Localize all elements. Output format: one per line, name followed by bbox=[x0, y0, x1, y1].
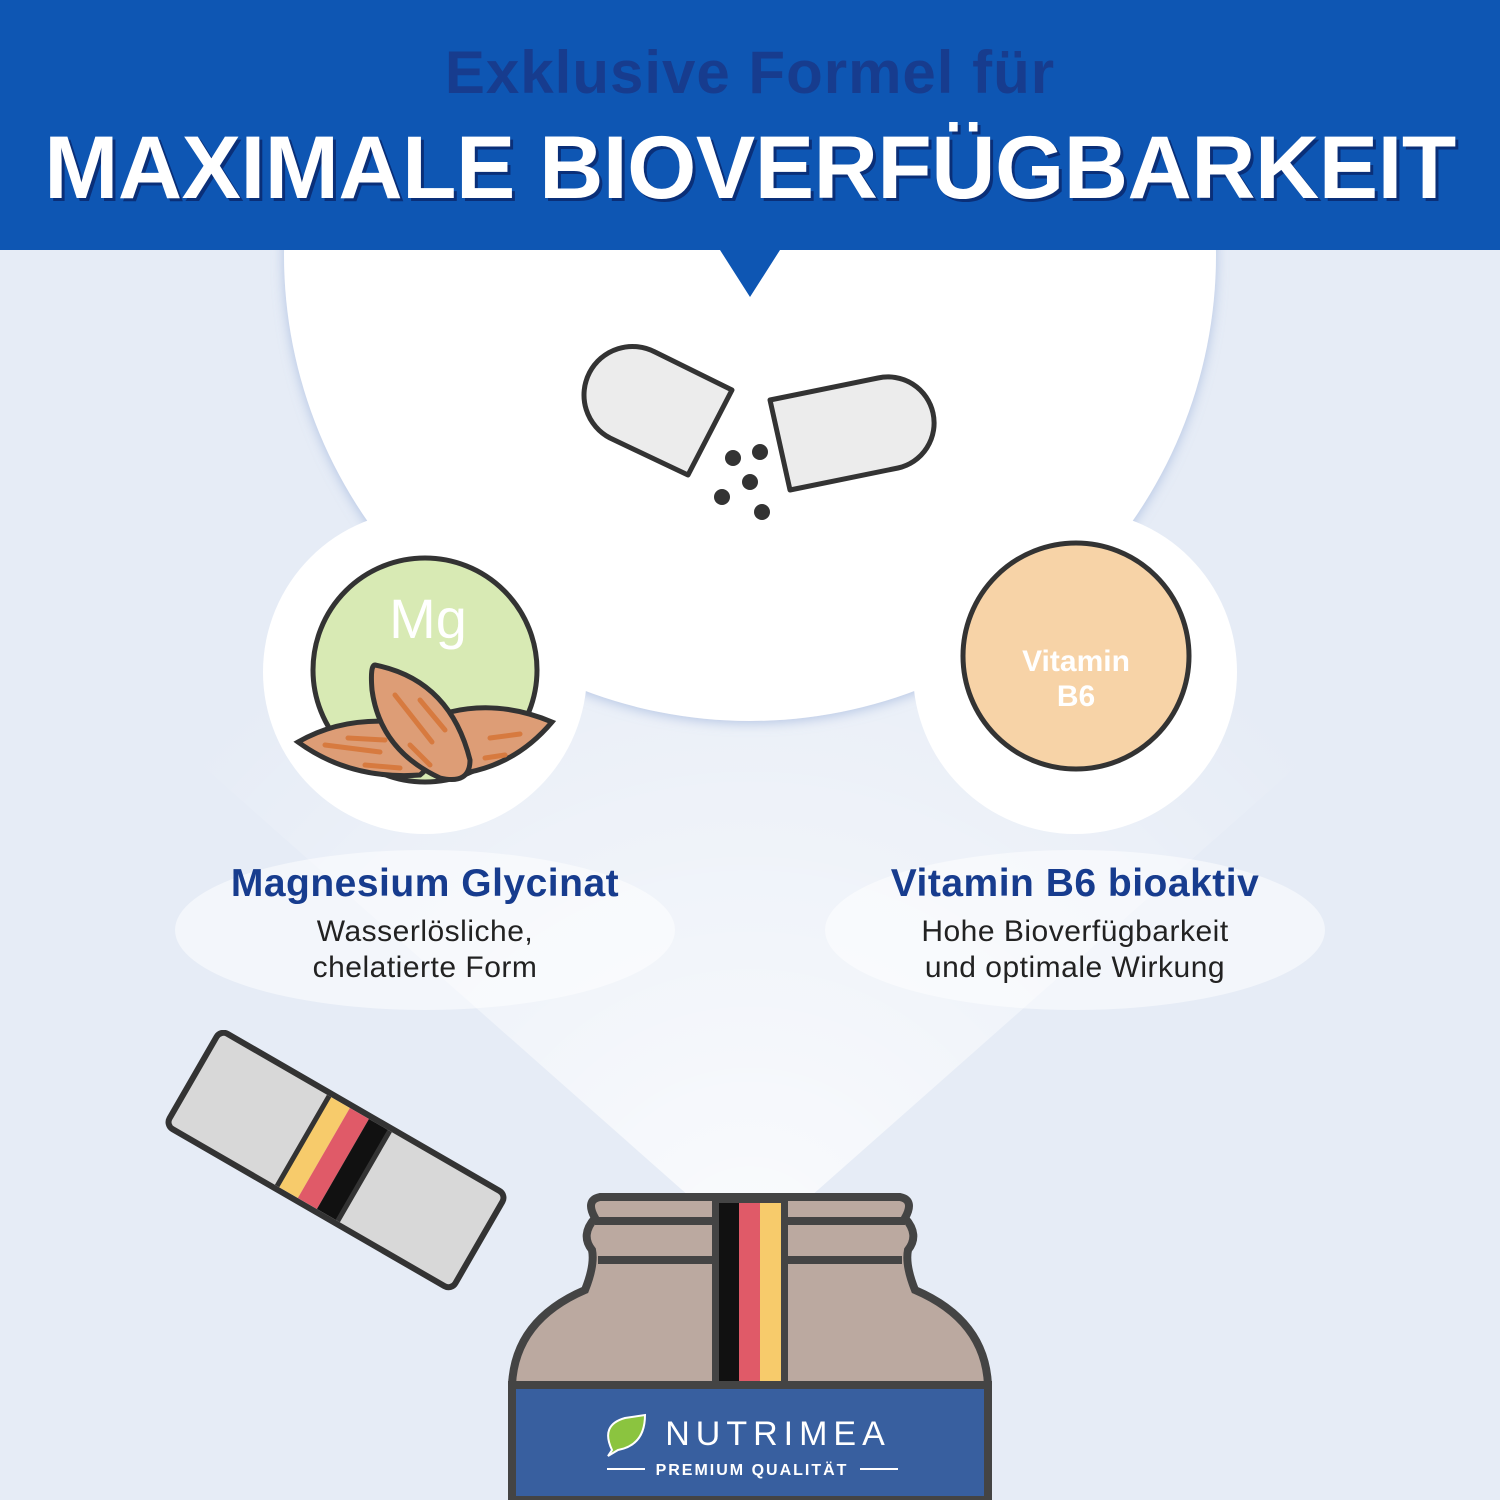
panel: vitamin B6 icon: B6 bbox=[1057, 680, 1095, 713]
subtitle: Exklusive Formel für bbox=[445, 39, 1055, 106]
icon: jar lid bbox=[166, 1030, 506, 1290]
header banner bbox=[0, 0, 1500, 297]
icon: broken capsule bbox=[582, 344, 937, 520]
text block: magnesium bbox=[231, 862, 619, 984]
icon: jar: PREMIUM QUALITÄT bbox=[656, 1461, 848, 1479]
text block: magnesium: Wasserlösliche, bbox=[317, 915, 533, 948]
text block: vitamin B6: Hohe Bioverfügbarkeit bbox=[921, 915, 1229, 948]
text block: magnesium: chelatierte Form bbox=[313, 951, 537, 984]
panel: vitamin B6 icon: Vitamin bbox=[1022, 645, 1130, 678]
text block: vitamin B6: Vitamin B6 bioaktiv bbox=[891, 862, 1259, 905]
panel: magnesium icon bbox=[263, 520, 586, 834]
panel: vitamin B6 icon bbox=[914, 520, 1237, 834]
title: MAXIMALE BIOVERFÜGBARKEIT bbox=[44, 117, 1456, 217]
white big circle bbox=[284, 0, 1216, 721]
icon: jar: NUTRIMEA bbox=[665, 1415, 891, 1453]
text block: vitamin B6: und optimale Wirkung bbox=[925, 951, 1225, 984]
panel: magnesium icon: Mg bbox=[389, 587, 467, 650]
text block: vitamin B6 bbox=[891, 862, 1259, 984]
text block: magnesium: Magnesium Glycinat bbox=[231, 862, 619, 905]
icon: jar bbox=[508, 1193, 992, 1500]
